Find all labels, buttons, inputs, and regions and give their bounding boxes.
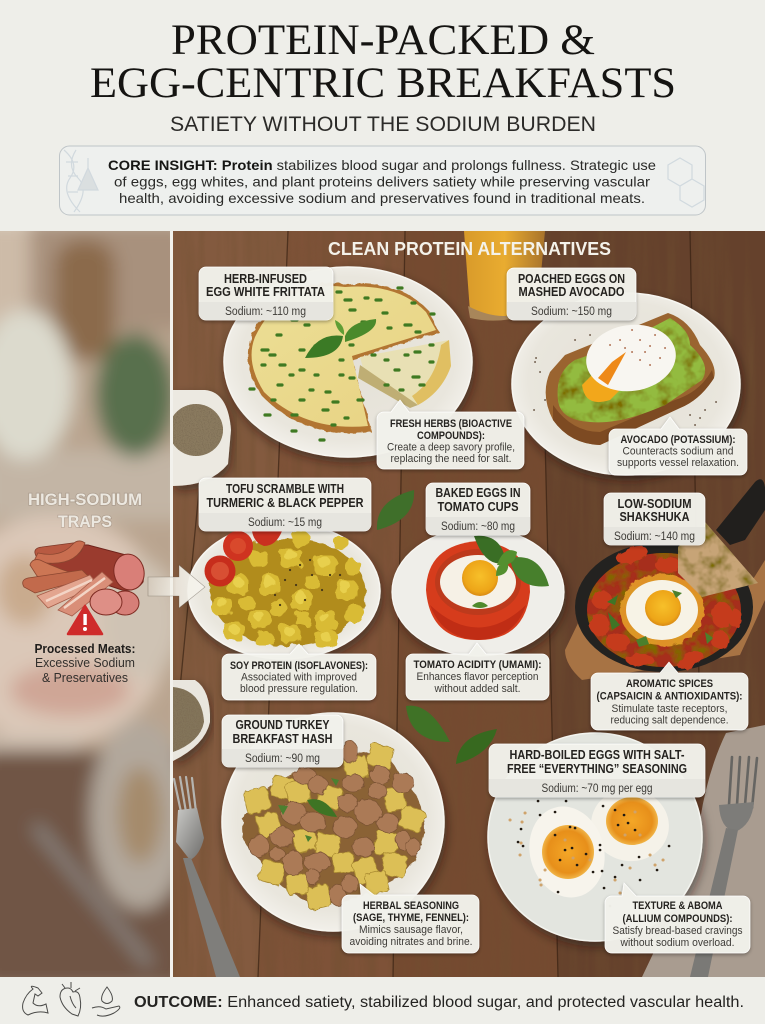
label: herb-infused egg white frittata [199,267,333,320]
food: seasoning bowl bottom [173,680,210,761]
food: seasoning bowl top [169,390,231,486]
callout: texture and aroma: (ALLIUM COMPOUNDS): [622,913,732,925]
icon: processed meats [23,541,147,616]
label: herb-infused egg white frittata: Sodium: ~110 mg [225,306,306,318]
label: hard-boiled eggs: FREE “EVERYTHING” SEASONING [507,762,687,776]
callout: aromatic spices: reducing salt dependence. [610,714,728,726]
label: herb-infused egg white frittata: HERB-INFUSED [224,272,307,286]
callout: fresh herbs: FRESH HERBS (BIOACTIVE [390,418,512,430]
icon: water drop in hand [92,987,120,1016]
label: baked eggs in tomato cups: TOMATO CUPS [438,500,518,514]
callout: texture and aroma: Satisfy bread-based cravings [612,925,743,937]
callout: avocado [609,417,747,475]
label: ground turkey hash: BREAKFAST HASH [232,732,332,746]
panel: core insight: health, avoiding excessive sodium and preservatives found in traditional meats. [119,191,645,206]
panel: core insight [60,146,706,215]
callout: fresh herbs: Create a deep savory profile, [387,442,515,454]
label: poached eggs on mashed avocado: MASHED AVOCADO [518,285,625,299]
food: turkey hash plate [222,713,444,931]
callout: texture and aroma: without sodium overload. [620,937,734,949]
callout: avocado: Counteracts sodium and [622,446,734,458]
label: poached eggs on mashed avocado: Sodium: ~150 mg [531,306,612,318]
callout: herbal seasoning: (SAGE, THYME, FENNEL): [353,912,469,924]
label: poached eggs on mashed avocado: POACHED EGGS ON [518,272,625,286]
title: EGG-CENTRIC BREAKFASTS [90,60,676,107]
callout: soy protein [222,644,376,700]
callout: texture and aroma: TEXTURE & ABOMA [632,900,723,912]
panel: clean protein alternatives (wood table) [169,231,765,977]
callout: tomato acidity: TOMATO ACIDITY (UMAMI): [414,659,542,671]
title: PROTEIN-PACKED & [171,17,595,64]
label: baked eggs in tomato cups: Sodium: ~80 mg [441,521,515,533]
label: baked eggs in tomato cups [426,483,530,535]
panel: core insight: CORE INSIGHT: Protein stabilizes blood sugar and prolongs fullness. Strategic use [108,158,656,173]
icon: flexed arm [23,986,48,1015]
food: basil leaves lower [406,706,497,764]
icon: warning triangle [68,606,102,634]
callout: soy protein: Associated with improved [241,672,357,684]
callout: texture and aroma [605,883,750,953]
label: tofu scramble: TOFU SCRAMBLE WITH [226,482,344,496]
callout: herbal seasoning: HERBAL SEASONING [363,900,459,912]
callout: fresh herbs: replacing the need for salt. [390,453,512,465]
label: herb-infused egg white frittata: EGG WHITE FRITTATA [206,285,325,299]
icon: heart [60,982,81,1016]
header [60,17,706,215]
label: hard-boiled eggs: HARD-BOILED EGGS WITH SALT- [510,748,684,762]
label: tofu scramble [199,478,371,531]
callout: tomato acidity [406,643,549,700]
label: hard-boiled eggs [489,744,705,797]
callout: herbal seasoning: avoiding nitrates and brine. [350,936,472,948]
callout: aromatic spices [591,662,748,730]
heading: clean protein alternatives: CLEAN PROTEIN ALTERNATIVES [328,239,611,259]
label: poached eggs on mashed avocado [507,268,636,320]
icon: orange juice glass [464,231,545,321]
callout: avocado: AVOCADO (POTASSIUM): [620,434,736,446]
heading: high-sodium traps: TRAPS [58,513,112,531]
food: baked egg tomato plate [392,528,564,656]
callout: fresh herbs [377,400,524,469]
subtitle: SATIETY WITHOUT THE SODIUM BURDEN [170,113,596,136]
arrow: traps to alternatives [148,565,205,608]
icon: left fork [174,777,240,977]
panel: core insight: of eggs, egg whites, and plant proteins delivers satiety while preserving vascular [114,174,651,190]
outcome text: OUTCOME: Enhanced satiety, stabilized blood sugar, and protected vascular health. [134,994,744,1011]
food: tofu scramble plate [188,523,380,659]
footer [0,977,765,1024]
callout: aromatic spices: (CAPSAICIN & ANTIOXIDANTS): [596,690,742,702]
food: frittata plate [224,267,472,457]
label: ground turkey hash [222,715,343,767]
label: ground turkey hash: GROUND TURKEY [236,718,330,732]
text: processed meats: Processed Meats: [34,642,136,656]
label: tofu scramble: Sodium: ~15 mg [248,517,322,529]
heading: high-sodium traps [28,492,142,528]
label: low-sodium shakshuka: LOW-SODIUM [618,497,692,511]
callout: aromatic spices: AROMATIC SPICES [626,678,713,690]
callout: avocado: supports vessel relaxation. [617,457,739,469]
callout: aromatic spices: Stimulate taste receptors, [612,703,728,715]
food: shakshuka skillet on board [565,479,765,680]
callout: fresh herbs: COMPOUNDS): [417,430,485,442]
callout: tomato acidity: Enhances flavor perception [416,671,538,683]
food: poached egg toast plate [512,293,740,475]
separator [170,231,173,977]
callout: herbal seasoning [342,884,479,953]
food: napkin [642,725,765,977]
text: processed meats: & Preservatives [42,671,128,685]
label: ground turkey hash: Sodium: ~90 mg [245,753,320,765]
title [90,17,676,107]
icon: right fork [690,757,757,977]
callout: herbal seasoning: Mimics sausage flavor, [359,924,463,936]
text: processed meats [35,644,134,682]
callout: soy protein: blood pressure regulation. [240,683,358,695]
label: tofu scramble: TURMERIC & BLACK PEPPER [206,496,364,510]
food: hard-boiled egg plate [488,733,702,941]
label: baked eggs in tomato cups: BAKED EGGS IN [436,486,520,500]
label: low-sodium shakshuka: Sodium: ~140 mg [614,531,695,543]
heading: high-sodium traps: HIGH-SODIUM [28,491,142,509]
text: processed meats: Excessive Sodium [35,656,135,670]
label: low-sodium shakshuka [604,493,705,545]
food: basil leaf middle [377,490,414,530]
label: hard-boiled eggs: Sodium: ~70 mg per egg [542,783,652,795]
callout: tomato acidity: without added salt. [434,683,520,695]
callout: soy protein: SOY PROTEIN (ISOFLAVONES): [230,660,368,672]
label: low-sodium shakshuka: SHAKSHUKA [620,510,690,524]
panel: high-sodium traps (left blurred) [0,231,170,977]
